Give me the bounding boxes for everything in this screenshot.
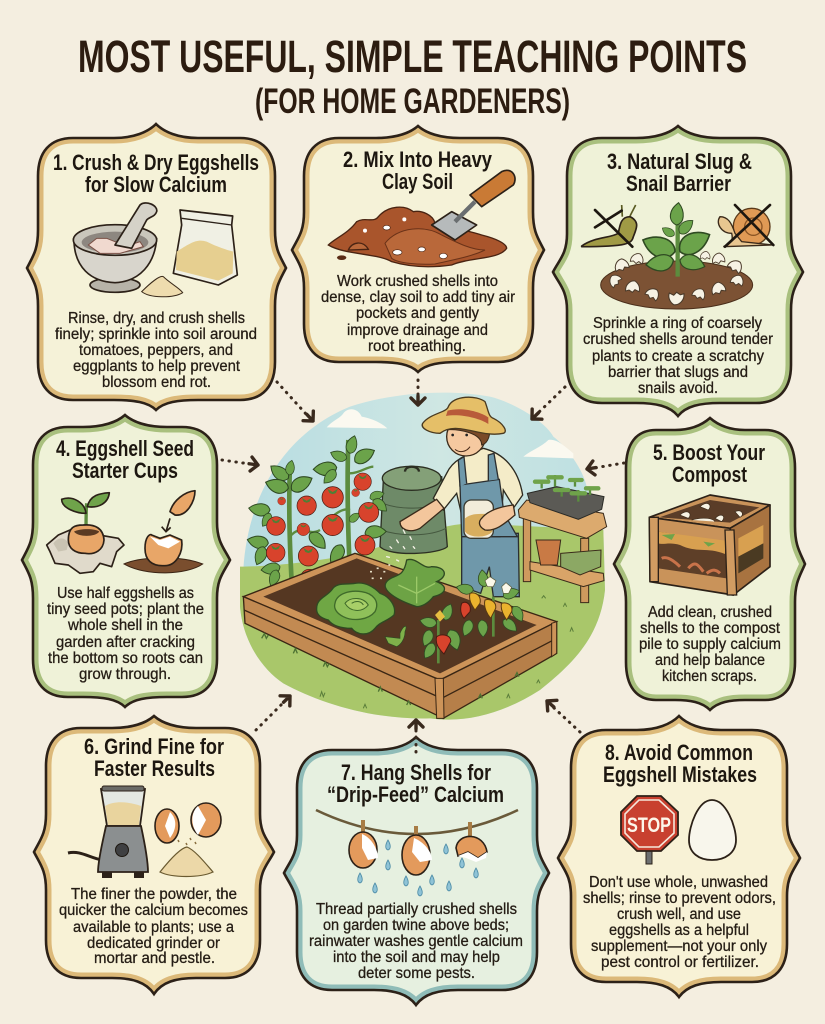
panel 6: grind fine for faster results: The finer the powder, the <box>71 886 237 903</box>
panel 2: mix into heavy clay soil: pockets and gently <box>356 305 479 322</box>
panel 8: avoid common eggshell mistakes: eggshells as a helpful <box>609 922 749 939</box>
panel 2: mix into heavy clay soil: 2. Mix Into Heavy <box>343 147 493 172</box>
icon: wooden compost crate <box>649 495 770 595</box>
icon: stop sign and whole egg: STOP <box>627 814 671 837</box>
panel 1: crush and dry eggshells: blossom end rot. <box>102 374 211 391</box>
panel 6: grind fine for faster results: quicker the calcium becomes <box>59 902 248 919</box>
raised wooden bed <box>243 553 557 718</box>
panel 2: mix into heavy clay soil: root breathing. <box>368 338 466 355</box>
farmer <box>372 397 523 597</box>
title: (FOR HOME GARDENERS) <box>255 82 570 121</box>
icon: shells hanging on twine with drips <box>316 810 518 896</box>
panel 4: eggshell seed starter cups: grow through. <box>79 666 171 683</box>
compost bin <box>380 466 447 553</box>
arrow: panel 4 to garden <box>222 457 259 472</box>
grass <box>240 523 605 720</box>
panel 5: boost your compost: shells to the compost <box>640 620 781 637</box>
panel 1: crush and dry eggshells <box>27 124 286 410</box>
panel 3: natural slug and snail barrier: barrier that slugs and <box>608 364 748 381</box>
panel 2: mix into heavy clay soil <box>292 126 544 372</box>
panel 7: hang shells for drip-feed calcium: rainwater washes gentle calcium <box>309 933 523 950</box>
panel 3: natural slug and snail barrier: plants to create a scratchy <box>592 348 764 365</box>
panel 5: boost your compost: kitchen scraps. <box>662 668 757 685</box>
grass tufts <box>320 596 573 708</box>
panel 3: natural slug and snail barrier: crushed shells around tender <box>583 331 774 348</box>
panel 2: mix into heavy clay soil: dense, clay soil to add tiny air <box>321 289 516 306</box>
panel 1: crush and dry eggshells: tomatoes, peppers, and <box>79 342 233 359</box>
panel 1: crush and dry eggshells: Rinse, dry, and crush shells <box>68 310 245 327</box>
potting table with seedlings <box>518 475 607 603</box>
sky <box>240 393 605 720</box>
panel 3: natural slug and snail barrier: Snail Barrier <box>626 171 731 196</box>
arrow: panel 1 to garden <box>277 382 318 426</box>
panel 5: boost your compost <box>614 418 805 710</box>
panel 7: hang shells for drip-feed calcium: into the soil and may help <box>333 949 500 966</box>
panel 8: avoid common eggshell mistakes: supplement—not your only <box>591 938 767 955</box>
panel 7: hang shells for drip-feed calcium: Thread partially crushed shells <box>316 901 517 918</box>
arrow: panel 7 to garden <box>409 720 423 752</box>
panel 8: avoid common eggshell mistakes: crush well, and use <box>617 906 741 923</box>
panel 8: avoid common eggshell mistakes: 8. Avoid Common <box>605 740 753 765</box>
panel 6: grind fine for faster results <box>34 716 274 994</box>
panel 1: crush and dry eggshells: 1. Crush & Dry Eggshells <box>53 150 259 175</box>
icon: mortar, pestle and bag of powder <box>73 203 237 297</box>
panel 8: avoid common eggshell mistakes: Don't use whole, unwashed <box>589 874 768 891</box>
panel 6: grind fine for faster results: mortar and pestle. <box>94 950 215 967</box>
panel 7: hang shells for drip-feed calcium <box>284 737 549 1005</box>
pepper plants <box>385 569 527 663</box>
title <box>78 31 747 121</box>
panel 5: boost your compost: Compost <box>672 462 748 487</box>
panel 5: boost your compost: pile to supply calcium <box>639 636 781 653</box>
panel 5: boost your compost: Add clean, crushed <box>648 604 772 621</box>
panel 7: hang shells for drip-feed calcium: on garden twine above beds; <box>323 917 509 934</box>
icon: clay soil mound and trowel <box>328 170 515 267</box>
panel 4: eggshell seed starter cups <box>22 415 230 707</box>
panel 8: avoid common eggshell mistakes <box>558 716 800 997</box>
panel 7: hang shells for drip-feed calcium: deter some pests. <box>358 965 475 982</box>
central garden illustration <box>240 393 607 720</box>
arrow: panel 6 to garden <box>256 691 295 730</box>
panel 5: boost your compost: and help balance <box>655 652 765 669</box>
arrow: panel 3 to garden <box>527 387 565 424</box>
arrow: panel 8 to garden <box>542 696 580 732</box>
icon: stop sign and whole egg <box>621 796 736 864</box>
spinach greens <box>385 559 444 607</box>
panel 5: boost your compost: 5. Boost Your <box>653 440 765 465</box>
icon: blender with shells and powder <box>68 786 221 878</box>
water drops <box>358 840 478 896</box>
panel 4: eggshell seed starter cups: 4. Eggshell Seed <box>56 436 194 461</box>
panel 6: grind fine for faster results: available to plants; use a <box>73 919 234 936</box>
panel 1: crush and dry eggshells: for Slow Calcium <box>85 172 227 197</box>
panel 1: crush and dry eggshells: finely; sprinkle into soil around <box>55 326 257 343</box>
clouds <box>327 409 573 458</box>
panel 7: hang shells for drip-feed calcium: “Drip-Feed” Calcium <box>327 782 504 807</box>
arrow: panel 2 to garden <box>411 380 425 405</box>
panel 7: hang shells for drip-feed calcium: 7. Hang Shells for <box>341 760 491 785</box>
panel 6: grind fine for faster results: Faster Results <box>94 756 215 781</box>
panel 6: grind fine for faster results: dedicated grinder or <box>87 935 221 952</box>
panel 3: natural slug and snail barrier <box>553 126 803 416</box>
panel 3: natural slug and snail barrier: snails avoid. <box>638 380 718 397</box>
tomato plants <box>246 434 390 598</box>
panel 4: eggshell seed starter cups: Starter Cups <box>72 458 178 483</box>
panel 4: eggshell seed starter cups: Use half eggshells as <box>57 585 194 602</box>
panel 4: eggshell seed starter cups: garden after cracking <box>56 634 195 651</box>
panel 4: eggshell seed starter cups: tiny seed pots; plant the <box>47 601 204 618</box>
panel 8: avoid common eggshell mistakes: shells; rinse to prevent odors, <box>583 890 776 907</box>
panel 2: mix into heavy clay soil: Clay Soil <box>382 169 453 194</box>
panel 2: mix into heavy clay soil: Work crushed shells into <box>337 273 498 290</box>
panel 3: natural slug and snail barrier: 3. Natural Slug & <box>607 149 752 174</box>
panel 6: grind fine for faster results: 6. Grind Fine for <box>84 734 224 759</box>
panel 8: avoid common eggshell mistakes: Eggshell Mistakes <box>603 762 757 787</box>
icon: seedling in egg carton and shell planted in soil <box>47 491 203 573</box>
arrow: panel 5 to garden <box>586 461 624 476</box>
panel 4: eggshell seed starter cups: the bottom so roots can <box>48 650 203 667</box>
panel 2: mix into heavy clay soil: improve drainage and <box>347 322 488 339</box>
sprinkled shell flecks <box>370 565 390 578</box>
lettuce <box>317 583 395 634</box>
panel 1: crush and dry eggshells: eggplants to help prevent <box>73 358 241 375</box>
panel 8: avoid common eggshell mistakes: pest control or fertilizer. <box>601 954 759 971</box>
icon: plant in shell ring with crossed slug and snail <box>582 202 773 309</box>
panel 4: eggshell seed starter cups: whole shell in the <box>67 617 183 634</box>
panel 3: natural slug and snail barrier: Sprinkle a ring of coarsely <box>593 315 762 332</box>
